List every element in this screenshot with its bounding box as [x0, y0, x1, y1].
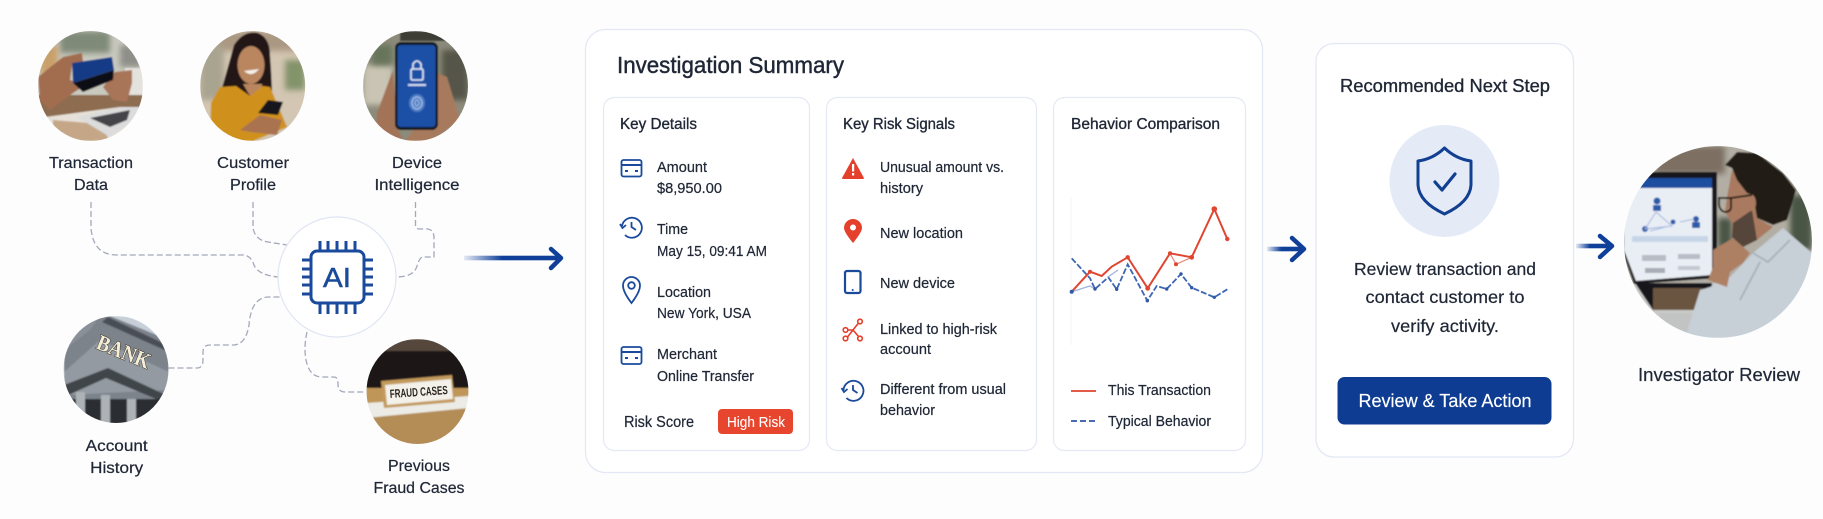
label: transaction data: Transaction — [49, 155, 133, 172]
photo: device intelligence — [363, 31, 469, 141]
icon: red location pin — [844, 219, 862, 243]
icon: location pin — [623, 277, 640, 303]
photo: account history bank: BANK — [93, 329, 154, 374]
icon: warning triangle — [842, 158, 864, 179]
AI hub circle with chip icon: AI — [323, 262, 351, 293]
icon: time clock — [620, 218, 642, 238]
connector: transaction data to AI — [91, 202, 278, 277]
text: unusual amount: history — [880, 181, 924, 197]
label: device intelligence: Device — [392, 155, 442, 172]
label: customer profile: Profile — [230, 177, 276, 194]
photo: account history bank — [64, 316, 169, 424]
button: review and take action: Review & Take Action — [1358, 391, 1532, 411]
label: account history: Account — [86, 438, 148, 455]
text: merchant: Online Transfer — [657, 369, 754, 385]
text: amount: $8,950.00 — [657, 181, 722, 197]
arrow: summary to next step — [1267, 238, 1304, 260]
icon: AI chip — [302, 241, 373, 314]
text: linked account: Linked to high-risk — [880, 322, 998, 338]
icon: amount card — [622, 160, 642, 176]
heading: key details: Key Details — [620, 116, 697, 133]
connector: device intelligence to AI — [396, 202, 434, 277]
label: investigator review: Investigator Review — [1638, 365, 1801, 385]
icon: linked nodes — [843, 319, 862, 341]
text: different behavior: behavior — [880, 403, 935, 419]
badge: high risk — [718, 409, 793, 434]
text: time: May 15, 09:41 AM — [657, 244, 767, 260]
panel: behavior comparison — [1054, 98, 1246, 450]
photo: investigator at monitor — [1622, 146, 1812, 338]
text: unusual amount: Unusual amount vs. — [880, 160, 1004, 176]
text: risk score: Risk Score — [624, 414, 694, 431]
icon: tablet — [845, 271, 860, 293]
text: location: Location — [657, 285, 711, 301]
photo: customer profile — [200, 31, 306, 141]
legend: this transaction: This Transaction — [1108, 383, 1211, 399]
photo: previous fraud cases — [366, 339, 469, 445]
connector: AI to previous fraud cases — [305, 332, 365, 392]
text: linked account: account — [880, 342, 931, 358]
text: amount: Amount — [657, 160, 707, 176]
icon: merchant card — [622, 347, 642, 364]
button: review and take action — [1338, 377, 1552, 424]
text: time — [657, 222, 767, 260]
label: previous fraud cases: Previous — [388, 458, 450, 475]
photo: previous fraud cases: FRAUD CASES — [389, 383, 448, 401]
text: recommendation — [1354, 259, 1536, 336]
heading: investigation summary: Investigation Summary — [617, 52, 844, 78]
connector: customer profile to AI — [253, 202, 287, 245]
text: recommendation: contact customer to — [1366, 287, 1524, 307]
label: transaction data — [49, 155, 133, 194]
connector: account history to AI — [168, 297, 281, 368]
text: location — [657, 285, 751, 322]
label: customer profile — [217, 155, 289, 194]
panel: key risk signals — [826, 98, 1036, 450]
text: different behavior — [880, 382, 1006, 419]
label: account history — [86, 438, 148, 477]
label: device intelligence — [374, 155, 460, 194]
text: amount — [657, 160, 722, 197]
text: recommendation: Review transaction and — [1354, 259, 1536, 279]
legend: typical behavior: Typical Behavior — [1108, 414, 1211, 430]
text: new location: New location — [880, 226, 963, 242]
text: new device: New device — [880, 276, 955, 292]
icon: shield check — [1390, 125, 1500, 237]
text: location: New York, USA — [657, 306, 751, 322]
text: different behavior: Different from usual — [880, 382, 1006, 398]
text: linked account — [880, 322, 998, 358]
label: customer profile: Customer — [217, 155, 289, 172]
text: time: Time — [657, 222, 688, 238]
arrow: next step to investigator — [1576, 236, 1612, 257]
label: previous fraud cases: Fraud Cases — [374, 480, 465, 497]
label: previous fraud cases — [374, 458, 465, 497]
AI hub circle with chip icon — [278, 217, 396, 337]
arrow: inputs to summary — [464, 249, 561, 268]
heading: behavior comparison: Behavior Comparison — [1071, 116, 1220, 133]
line chart — [1070, 197, 1230, 345]
text: recommendation: verify activity. — [1391, 316, 1499, 336]
text: unusual amount — [880, 160, 1004, 197]
text: merchant — [657, 347, 754, 385]
photo: transaction data — [38, 31, 143, 141]
label: account history: History — [90, 460, 143, 477]
panel: investigation summary — [586, 30, 1262, 472]
heading: recommended next step: Recommended Next Step — [1340, 76, 1550, 96]
panel: recommended next step — [1316, 44, 1574, 457]
heading: key risk signals: Key Risk Signals — [843, 116, 955, 133]
badge: high risk: High Risk — [727, 414, 785, 431]
label: transaction data: Data — [74, 177, 108, 194]
panel: key details — [604, 98, 810, 450]
icon: history clock — [842, 381, 863, 401]
text: merchant: Merchant — [657, 347, 717, 363]
label: device intelligence: Intelligence — [374, 177, 460, 194]
